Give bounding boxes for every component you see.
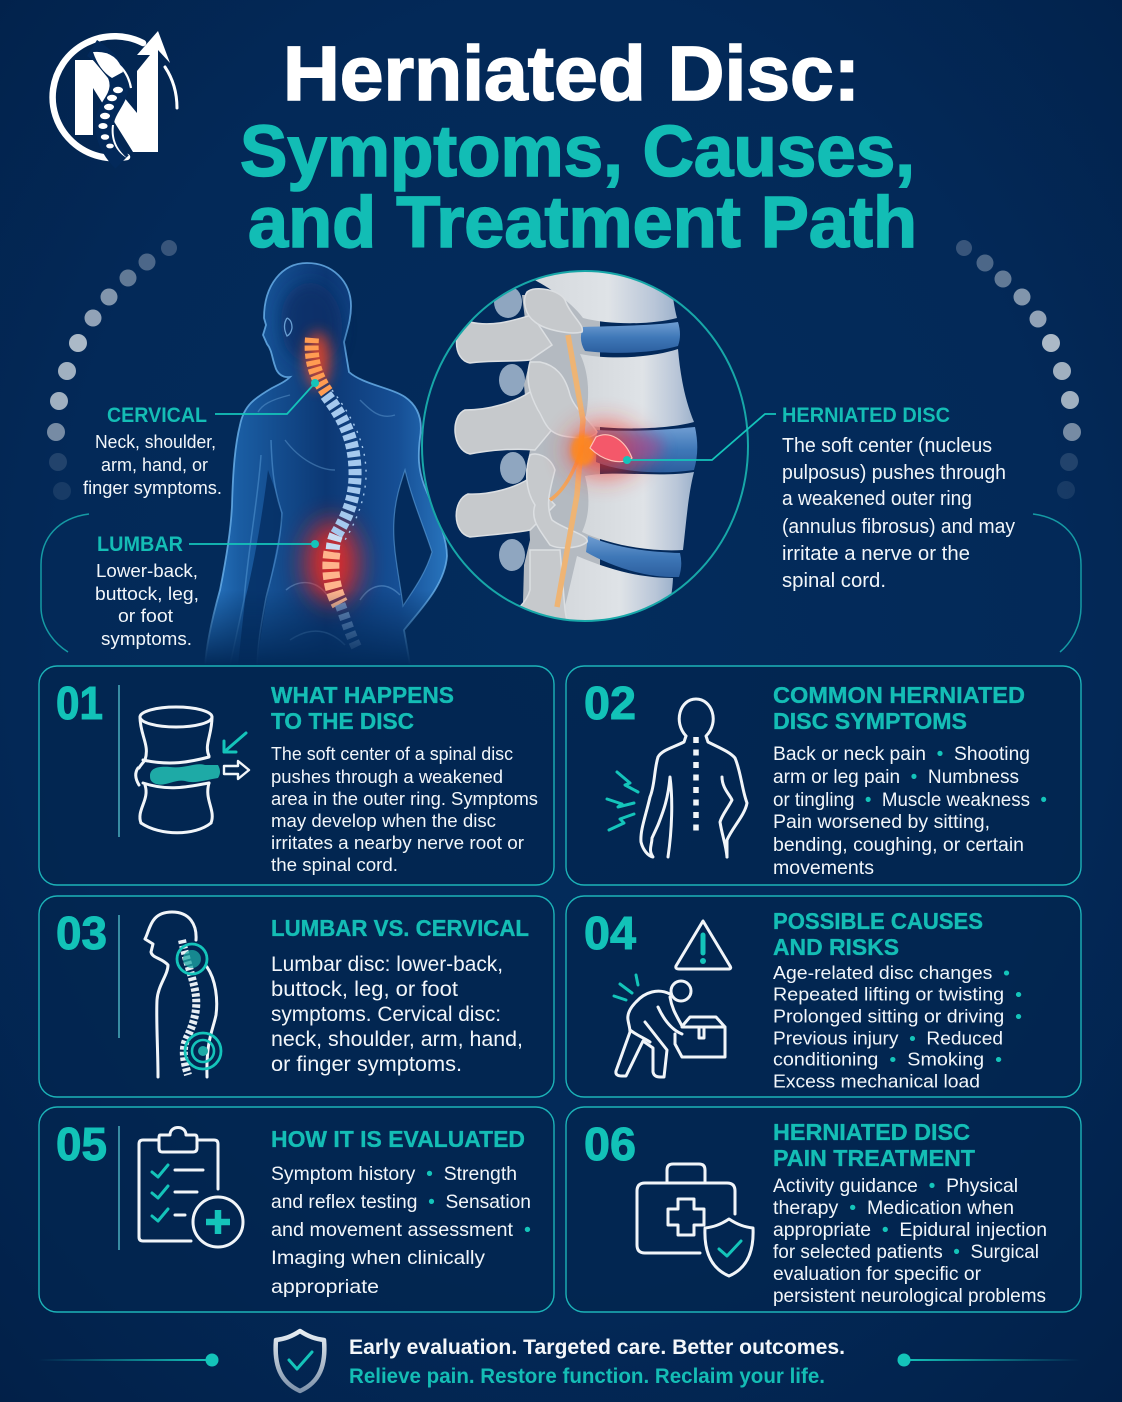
callout: herniated disc: HERNIATED DISC [782,404,950,427]
logo [53,31,177,162]
hero bracket right [1033,514,1081,652]
panel 05: how it is evaluated [39,1107,554,1312]
callout: herniated disc: (annulus fibrosus) and may [782,516,1015,538]
text block: for selected patients • Surgical [773,1242,1039,1263]
panel 06: herniated disc pain treatment [566,1107,1081,1312]
callout: cervical: Neck, shoulder, [95,431,216,452]
text block: Lumbar disc: lower-back, [271,953,503,976]
text block: movements [773,858,874,879]
icon: side profile with spine [145,912,221,1077]
title: Herniated Disc: [283,31,860,117]
text block: or finger symptoms. [271,1053,462,1076]
text block: Age-related disc changes • [773,962,1010,983]
callout: herniated disc: a weakened outer ring [782,488,972,510]
text block [271,1163,531,1298]
text block: and reflex testing • Sensation [271,1191,531,1213]
callout: cervical: finger symptoms. [83,477,222,498]
facet bumps [494,286,526,571]
text block: Repeated lifting or twisting • [773,984,1022,1004]
panel 02: common herniated disc symptoms [566,666,1081,885]
callout: lumbar: or foot [118,605,173,626]
icon: person lifting box [614,975,725,1077]
text block: persistent neurological problems [773,1286,1046,1307]
callout: lumbar: buttock, leg, [95,583,199,604]
heading: COMMON HERNIATED [773,682,1025,708]
icon: footer shield with check [276,1331,324,1391]
footer: left line and dot [38,1354,218,1366]
illustration: translucent body with spine [205,263,447,665]
footer text [349,1336,845,1388]
text block: may develop when the disc [271,810,496,831]
footer text: Relieve pain. Restore function. Reclaim your life. [349,1365,825,1388]
heading: DISC SYMPTOMS [773,708,967,734]
callout: lumbar: Lower-back, [96,560,198,581]
text block: Excess mechanical load [773,1070,980,1092]
callout: lumbar [95,533,319,649]
callout: herniated disc [623,404,1015,592]
heading [773,682,1025,734]
callout: herniated disc: irritate a nerve or the [782,543,970,565]
text block: Back or neck pain • Shooting [773,744,1030,765]
processes [455,289,597,640]
text block: therapy • Medication when [773,1198,1014,1219]
text block: Symptom history • Strength [271,1163,517,1185]
text block: neck, shoulder, arm, hand, [271,1028,523,1051]
title: Symptoms, Causes, [240,112,915,192]
dotted arc right [956,240,1081,499]
heading: WHAT HAPPENS [271,682,454,708]
text block: and movement assessment • [271,1219,531,1241]
panel 01: what happens to the disc: 01 [56,677,103,729]
panel 04: possible causes and risks: 04 [584,907,636,959]
heading [773,908,983,960]
heading [271,682,454,734]
text block: bending, coughing, or certain [773,835,1024,856]
callout: herniated disc: spinal cord. [782,570,886,592]
text block: irritates a nearby nerve root or [271,832,524,853]
text block: appropriate • Epidural injection [773,1220,1047,1241]
bone column behind nerve [522,295,600,640]
spine cervical [312,338,328,394]
text block: appropriate [271,1276,379,1298]
gap between right arm and torso [394,470,432,606]
callout: lumbar: symptoms. [101,628,192,649]
text block [271,743,538,875]
hero bracket left [41,514,89,652]
heading: HERNIATED DISC [773,1119,970,1145]
heading: PAIN TREATMENT [773,1145,975,1171]
icon: first aid case with shield [637,1164,753,1276]
panel 05: how it is evaluated: 05 [56,1118,107,1170]
title [240,31,917,263]
panel 02: common herniated disc symptoms: 02 [584,677,636,729]
inflamed area [569,424,641,476]
spinal nerve [557,335,583,607]
callout: cervical: CERVICAL [107,404,207,427]
heading: AND RISKS [773,934,899,960]
text block: conditioning • Smoking • [773,1048,1002,1070]
herniated nucleus [590,435,632,462]
text block: evaluation for specific or [773,1264,982,1285]
text block [773,962,1022,1092]
text block: Imaging when clinically [271,1247,485,1269]
icon: clipboard checklist with plus [139,1128,243,1247]
lumbar glow [306,521,358,605]
text block: pushes through a weakened [271,766,503,787]
text block: The soft center of a spinal disc [271,743,513,764]
spine lumbar [331,552,340,604]
title: and Treatment Path [248,183,917,263]
callout: cervical: arm, hand, or [101,454,208,475]
text block: buttock, leg, or foot [271,978,458,1001]
text block: arm or leg pain • Numbness [773,767,1019,788]
text block: Activity guidance • Physical [773,1176,1018,1197]
illustration: herniated disc magnified circle [422,262,748,640]
footer text: Early evaluation. Targeted care. Better outcomes. [349,1336,845,1359]
text block [271,953,523,1076]
heading: POSSIBLE CAUSES [773,908,983,934]
heading: HOW IT IS EVALUATED [271,1126,525,1152]
heading [773,1119,975,1171]
panel 03: lumbar vs cervical [39,896,554,1097]
panel 06: herniated disc pain treatment: 06 [584,1118,636,1170]
heading: TO THE DISC [271,708,414,734]
callout: herniated disc: The soft center (nucleus [782,435,992,457]
vertebral bodies [535,272,694,620]
text block: or tingling • Muscle weakness • [773,790,1047,811]
spine mid [326,395,355,535]
text block: Prolonged sitting or driving • [773,1006,1022,1026]
footer: right line and dot [898,1354,1081,1366]
dotted arc left [47,240,177,500]
text block [773,744,1047,879]
cervical glow [306,332,330,388]
icon: warning triangle [676,921,731,969]
gap between left arm and torso [238,470,282,665]
callout: lumbar: LUMBAR [97,533,183,556]
intervertebral discs [581,322,697,577]
heading: LUMBAR VS. CERVICAL [271,915,529,941]
text block: area in the outer ring. Symptoms [271,788,538,809]
panel 04: possible causes and risks [566,896,1081,1097]
text block [773,1176,1047,1307]
callout: cervical [83,379,319,498]
text block: symptoms. Cervical disc: [271,1003,501,1026]
icon: back with lightning [607,699,747,857]
panel 03: lumbar vs cervical: 03 [56,907,107,959]
text block: Previous injury • Reduced [773,1028,1003,1048]
icon: vertebra with bulging disc [136,707,249,833]
text block: Pain worsened by sitting, [773,812,990,833]
callout: herniated disc: pulposus) pushes through [782,462,1006,484]
panel 01: what happens to the disc [39,666,554,885]
text block: the spinal cord. [271,854,398,875]
